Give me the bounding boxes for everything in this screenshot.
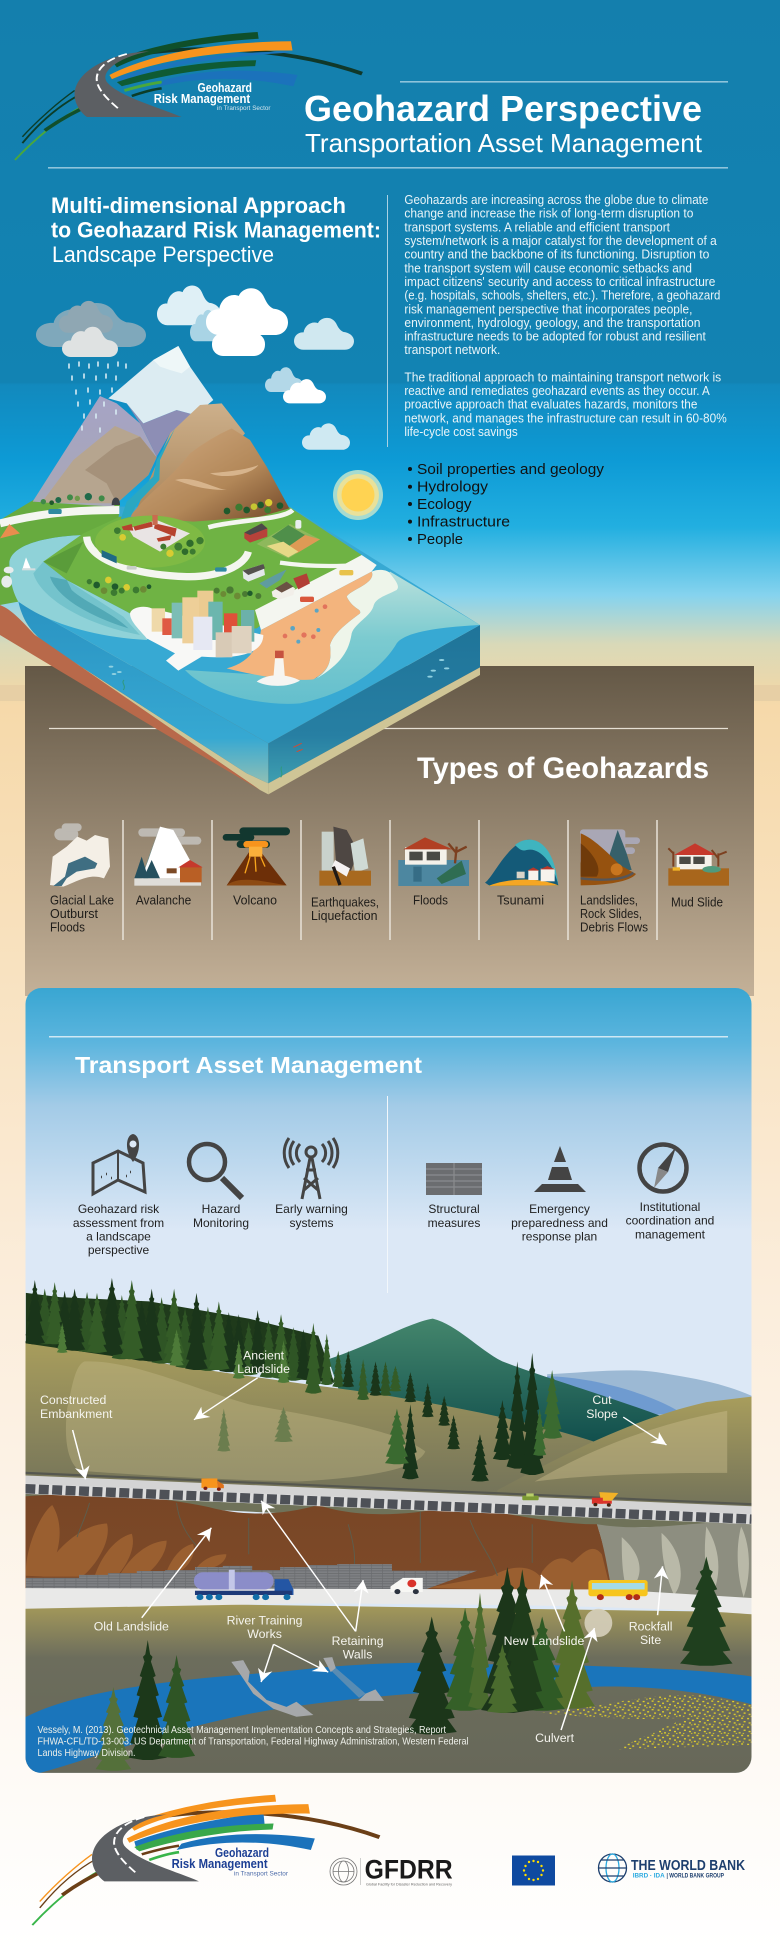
rain bbox=[69, 362, 126, 432]
bullet list: People bbox=[417, 531, 463, 548]
river mid bbox=[33, 562, 140, 635]
intro text: infrastructure needs to be adopted for robust and resilient bbox=[404, 330, 706, 344]
cloud: lower bbox=[302, 423, 350, 450]
ledges bbox=[175, 465, 258, 490]
label: geohazard risk assessment: Geohazard risk bbox=[78, 1202, 160, 1216]
hazard labels left: Outburst bbox=[50, 907, 99, 921]
illustration: isometric landscape block bbox=[0, 346, 480, 794]
intro text: Geohazards are increasing across the globe due to climate bbox=[404, 193, 708, 207]
citation bbox=[38, 1724, 468, 1759]
hillside bbox=[26, 1343, 594, 1496]
top logo: Risk Management bbox=[154, 91, 251, 106]
divider bbox=[387, 195, 388, 447]
arrows bbox=[73, 1378, 667, 1730]
treeline mass bbox=[26, 1293, 334, 1383]
tan mountain bbox=[42, 426, 157, 503]
label: rockfall site: Site bbox=[640, 1633, 661, 1647]
rule: below title bbox=[48, 167, 728, 169]
rule: top bbox=[400, 81, 728, 83]
river training works bbox=[231, 1657, 384, 1717]
heading: multi-dimensional approach: Landscape Perspective bbox=[52, 242, 274, 267]
icon: traffic cone bbox=[534, 1146, 586, 1192]
label: retaining walls bbox=[332, 1634, 384, 1662]
label: cut slope: Slope bbox=[586, 1407, 618, 1421]
intro text: system/network is a major catalyst for the development of a bbox=[404, 234, 717, 248]
grey rock bbox=[597, 1522, 752, 1599]
intro text: (e.g. hospitals, schools, shelters, etc.). Therefore, a geohazard bbox=[404, 289, 720, 303]
cloud: white large bbox=[206, 288, 288, 356]
label: old landslide: Old Landslide bbox=[94, 1620, 169, 1634]
label: structural measures: Structural bbox=[428, 1202, 480, 1216]
hazard labels right bbox=[413, 894, 723, 934]
label: new landslide: New Landslide bbox=[504, 1634, 584, 1648]
rule: types heading bbox=[49, 728, 728, 730]
label: emergency preparedness bbox=[511, 1202, 608, 1244]
label: early warning bbox=[275, 1202, 348, 1230]
hazard labels right: Rock Slides, bbox=[580, 907, 642, 921]
label: emergency preparedness: response plan bbox=[522, 1230, 597, 1244]
label: geohazard risk assessment: assessment from bbox=[73, 1216, 164, 1230]
intro text: life-cycle cost savings bbox=[404, 425, 518, 439]
label: retaining walls: Walls bbox=[343, 1648, 372, 1662]
cloud: blue behind bbox=[190, 310, 223, 341]
cloud: right bbox=[294, 318, 354, 350]
label: hazard monitoring: Monitoring bbox=[193, 1216, 249, 1230]
label: geohazard risk assessment: a landscape bbox=[86, 1230, 151, 1244]
vehicle: tanker bbox=[194, 1570, 293, 1600]
panel: transport asset management bbox=[26, 988, 752, 1773]
label: institutional coordination bbox=[626, 1200, 714, 1242]
title: Geohazard Perspective bbox=[304, 88, 702, 129]
logo: EU flag bbox=[512, 1856, 555, 1886]
bullet list bbox=[408, 461, 605, 548]
city buildings bbox=[152, 591, 254, 657]
transport labels bbox=[73, 1200, 714, 1257]
top logo: Geohazard bbox=[198, 80, 252, 95]
cloud: pale front bbox=[62, 327, 118, 357]
slope folds bbox=[26, 1505, 611, 1591]
tan shadow bbox=[85, 437, 157, 503]
icon: magnifier bbox=[189, 1144, 242, 1198]
label: retaining walls: Retaining bbox=[332, 1634, 384, 1648]
icon: compass bbox=[640, 1144, 686, 1192]
label: hazard monitoring: Hazard bbox=[202, 1202, 240, 1216]
rear brown mountain bbox=[133, 403, 245, 517]
city plaza bbox=[130, 607, 263, 671]
label: constructed embankment bbox=[40, 1393, 113, 1421]
trees villa bbox=[114, 527, 204, 557]
hazard labels left bbox=[50, 894, 379, 934]
trees by town bbox=[214, 586, 261, 599]
rock fins bbox=[622, 1526, 749, 1597]
label: cut slope bbox=[586, 1393, 618, 1421]
green mountain bbox=[328, 1319, 664, 1443]
label: ancient landslide: Landslide bbox=[237, 1362, 290, 1376]
green land left bbox=[0, 500, 120, 605]
shallow water bbox=[185, 572, 480, 704]
intro text: transport network. bbox=[404, 343, 500, 357]
water surface bbox=[18, 507, 480, 743]
panel: types of geohazards background bbox=[25, 666, 754, 996]
label: institutional coordination: Institutional bbox=[640, 1200, 700, 1214]
sailboat and rocks bbox=[1, 557, 35, 588]
clouds bbox=[36, 286, 354, 450]
flower meadow bbox=[537, 1695, 752, 1749]
hazard icons left bbox=[50, 823, 371, 887]
icon: mud slide bbox=[668, 843, 729, 886]
land shadow bbox=[43, 542, 83, 573]
foreground hill trees bbox=[217, 1353, 562, 1481]
river deep bbox=[50, 577, 128, 628]
intro text: change and increase the risk of long-term disruption to bbox=[404, 207, 693, 221]
icon: landslides bbox=[580, 829, 640, 885]
label: rockfall site: Rockfall bbox=[629, 1620, 672, 1634]
roads bbox=[0, 510, 360, 577]
label: structural measures: measures bbox=[428, 1216, 480, 1230]
houses bbox=[243, 564, 310, 599]
intro text: proactive approach that evaluates hazards, monitors the bbox=[404, 398, 697, 412]
intro text: country and the backbone of its functioning. Disruption to bbox=[404, 248, 709, 262]
right hill bbox=[542, 1396, 752, 1506]
logo: World Bank: | WORLD BANK GROUP bbox=[666, 1874, 724, 1880]
label: river training works: River Training bbox=[227, 1614, 303, 1628]
lower road bbox=[25, 1588, 752, 1614]
bullet list: Soil properties and geology bbox=[417, 461, 605, 478]
cloud: small white bbox=[283, 379, 326, 403]
hazard icons right bbox=[398, 829, 729, 886]
mountain shadow bbox=[127, 403, 195, 457]
cloud: grey top bbox=[59, 301, 113, 333]
label: geohazard risk assessment: perspective bbox=[88, 1243, 150, 1257]
trees left bbox=[41, 493, 105, 505]
hill bbox=[95, 516, 205, 568]
icon: floods bbox=[398, 837, 469, 886]
farm bbox=[244, 520, 320, 558]
divider: transport bbox=[387, 1096, 388, 1293]
heading: multi-dimensional approach: to Geohazard Risk Management: bbox=[51, 218, 381, 242]
far mountains bbox=[547, 1370, 752, 1416]
citation: Lands Highway Division. bbox=[38, 1747, 136, 1759]
label: ancient landslide bbox=[237, 1348, 290, 1376]
intro text: impact citizens' security and access to critical infrastructure bbox=[404, 275, 715, 289]
label: institutional coordination: coordination and bbox=[626, 1214, 714, 1228]
icon: wall bbox=[426, 1163, 482, 1195]
lower ground bbox=[25, 1601, 752, 1773]
logo: World Bank: IBRD · IDA bbox=[633, 1872, 665, 1880]
snow cap bbox=[153, 346, 190, 373]
intro text: transport systems. A reliable and efficient transport bbox=[404, 220, 670, 234]
label: emergency preparedness: Emergency bbox=[529, 1202, 590, 1216]
label: structural measures bbox=[428, 1202, 480, 1230]
bullet list: Infrastructure bbox=[417, 514, 510, 531]
label: ancient landslide: Ancient bbox=[243, 1348, 285, 1362]
intro text: environment, hydrology, geology, and the transportation bbox=[404, 316, 700, 330]
label: constructed embankment: Embankment bbox=[40, 1407, 113, 1421]
heading: transport asset management: Transport Asset Management bbox=[75, 1052, 422, 1078]
label: emergency preparedness: preparedness and bbox=[511, 1216, 608, 1230]
rule: transport heading bbox=[49, 1036, 728, 1038]
citation: Vessely, M. (2013). Geotechnical Asset Management Implementation Concepts and Strategies, Report bbox=[38, 1724, 446, 1736]
snow peak bbox=[108, 346, 213, 423]
hazard labels left: Liquefaction bbox=[311, 909, 378, 923]
vehicle: orange van bbox=[201, 1478, 224, 1491]
heading: multi-dimensional approach bbox=[51, 193, 381, 267]
hazard labels right: Floods bbox=[413, 894, 448, 908]
bullet list: Hydrology bbox=[417, 479, 489, 496]
bridge bbox=[25, 1473, 752, 1519]
vehicles and tent bbox=[0, 509, 353, 602]
cloud: grey back bbox=[36, 303, 146, 347]
cut slope bbox=[535, 1411, 727, 1481]
heading: multi-dimensional approach: Multi-dimensional Approach bbox=[51, 193, 346, 218]
label: river training works bbox=[227, 1614, 303, 1641]
label: culvert: Culvert bbox=[535, 1731, 575, 1745]
hazard labels right: Mud Slide bbox=[671, 896, 723, 910]
river bbox=[25, 1663, 752, 1773]
foreground trees bbox=[96, 1556, 733, 1771]
culvert bbox=[584, 1609, 612, 1637]
label: cut slope: Cut bbox=[592, 1393, 612, 1407]
grey mountain bbox=[33, 396, 157, 507]
ancient landslide bbox=[66, 1361, 425, 1481]
intro text: the transport system will cause economic setbacks and bbox=[404, 261, 692, 275]
icon: tsunami bbox=[485, 840, 558, 886]
vehicle: dump truck bbox=[592, 1492, 618, 1507]
label: early warning: Early warning bbox=[275, 1202, 348, 1216]
intro text: risk management perspective that incorporates people, bbox=[404, 302, 692, 316]
bottom logo: Geohazard bbox=[215, 1845, 269, 1860]
bottom logo: Risk Management bbox=[172, 1856, 268, 1871]
hazard labels left: Glacial Lake bbox=[50, 894, 114, 908]
label: river training works: Works bbox=[247, 1627, 282, 1641]
hazard labels left: Floods bbox=[50, 920, 85, 934]
icon: tower bbox=[284, 1138, 338, 1199]
lighthouse bbox=[257, 651, 300, 686]
waterfall bbox=[121, 428, 175, 519]
scene labels bbox=[40, 1348, 672, 1745]
bottom logo bbox=[32, 1795, 380, 1925]
citation: FHWA-CFL/TD-13-003. US Department of Transportation, Federal Highway Administration, Western Federal bbox=[38, 1736, 468, 1748]
front brown mountain bbox=[130, 428, 289, 522]
cloud: small blue bbox=[265, 367, 303, 392]
fish and seaweed bbox=[109, 659, 449, 777]
label: hazard monitoring bbox=[193, 1202, 249, 1230]
vehicle: green car bbox=[522, 1493, 539, 1500]
vehicle: bus bbox=[588, 1580, 648, 1600]
hazard separators bbox=[123, 820, 657, 940]
label: geohazard risk assessment bbox=[73, 1202, 164, 1257]
icon: volcano bbox=[223, 827, 290, 885]
block side faces bbox=[0, 602, 480, 794]
trees lower mid bbox=[87, 577, 151, 596]
hazard labels right: Landslides, bbox=[580, 894, 638, 908]
top logo bbox=[15, 32, 362, 160]
tunnel bbox=[112, 497, 120, 505]
bullet list: Ecology bbox=[417, 496, 472, 513]
main road bbox=[255, 555, 377, 630]
beach umbrellas bbox=[283, 604, 327, 644]
hazard labels left: Volcano bbox=[233, 894, 277, 908]
hazard labels right: Debris Flows bbox=[580, 920, 648, 934]
surf bbox=[315, 570, 398, 679]
heading: types of geohazards: Types of Geohazards bbox=[417, 752, 709, 785]
top logo: in Transport Sector bbox=[217, 106, 270, 112]
label: rockfall site bbox=[629, 1620, 672, 1647]
icon: glacial lake bbox=[50, 823, 110, 887]
sun bbox=[333, 470, 383, 520]
cloud: pale blue bbox=[157, 286, 221, 325]
beach bbox=[227, 572, 372, 680]
intro text: network, and manages the infrastructure can result in 60-80% bbox=[404, 411, 727, 425]
slope streaks bbox=[77, 1503, 532, 1576]
scene: road corridor landscape bbox=[25, 1278, 752, 1773]
hazard labels right: Tsunami bbox=[497, 894, 544, 908]
logo: GFDRR: Global Facility for Disaster Reduction and Recovery bbox=[366, 1882, 452, 1886]
bottom logo: in Transport Sector bbox=[234, 1872, 288, 1878]
logo: GFDRR: GFDRR bbox=[365, 1854, 453, 1884]
icon: earthquake bbox=[319, 827, 371, 886]
logo: World Bank bbox=[598, 1854, 745, 1882]
treeline bbox=[25, 1278, 460, 1449]
icon: map with pin bbox=[93, 1134, 145, 1194]
label: constructed embankment: Constructed bbox=[40, 1393, 106, 1407]
logo: World Bank: THE WORLD BANK bbox=[631, 1858, 745, 1874]
hazard labels left: Earthquakes, bbox=[311, 896, 379, 910]
label: early warning: systems bbox=[289, 1216, 334, 1230]
trees row upper right bbox=[224, 499, 283, 514]
hazard labels left: Avalanche bbox=[136, 894, 191, 908]
river bbox=[9, 535, 150, 640]
intro text bbox=[404, 193, 727, 439]
gabion retaining wall bbox=[26, 1564, 478, 1589]
logo: GFDRR bbox=[330, 1854, 453, 1886]
icon: avalanche bbox=[134, 827, 203, 886]
subtitle: Transportation Asset Management bbox=[305, 128, 703, 158]
soil under bridge bbox=[184, 1502, 716, 1528]
intro text: reactive and remediates geohazard events as they occur. A bbox=[404, 384, 710, 398]
intro text: The traditional approach to maintaining transport network is bbox=[404, 370, 721, 384]
brown slope bbox=[25, 1494, 613, 1593]
green land main bbox=[43, 507, 362, 635]
villa bbox=[122, 515, 190, 552]
vehicle: ambulance bbox=[390, 1578, 423, 1594]
label: institutional coordination: management bbox=[635, 1228, 706, 1242]
